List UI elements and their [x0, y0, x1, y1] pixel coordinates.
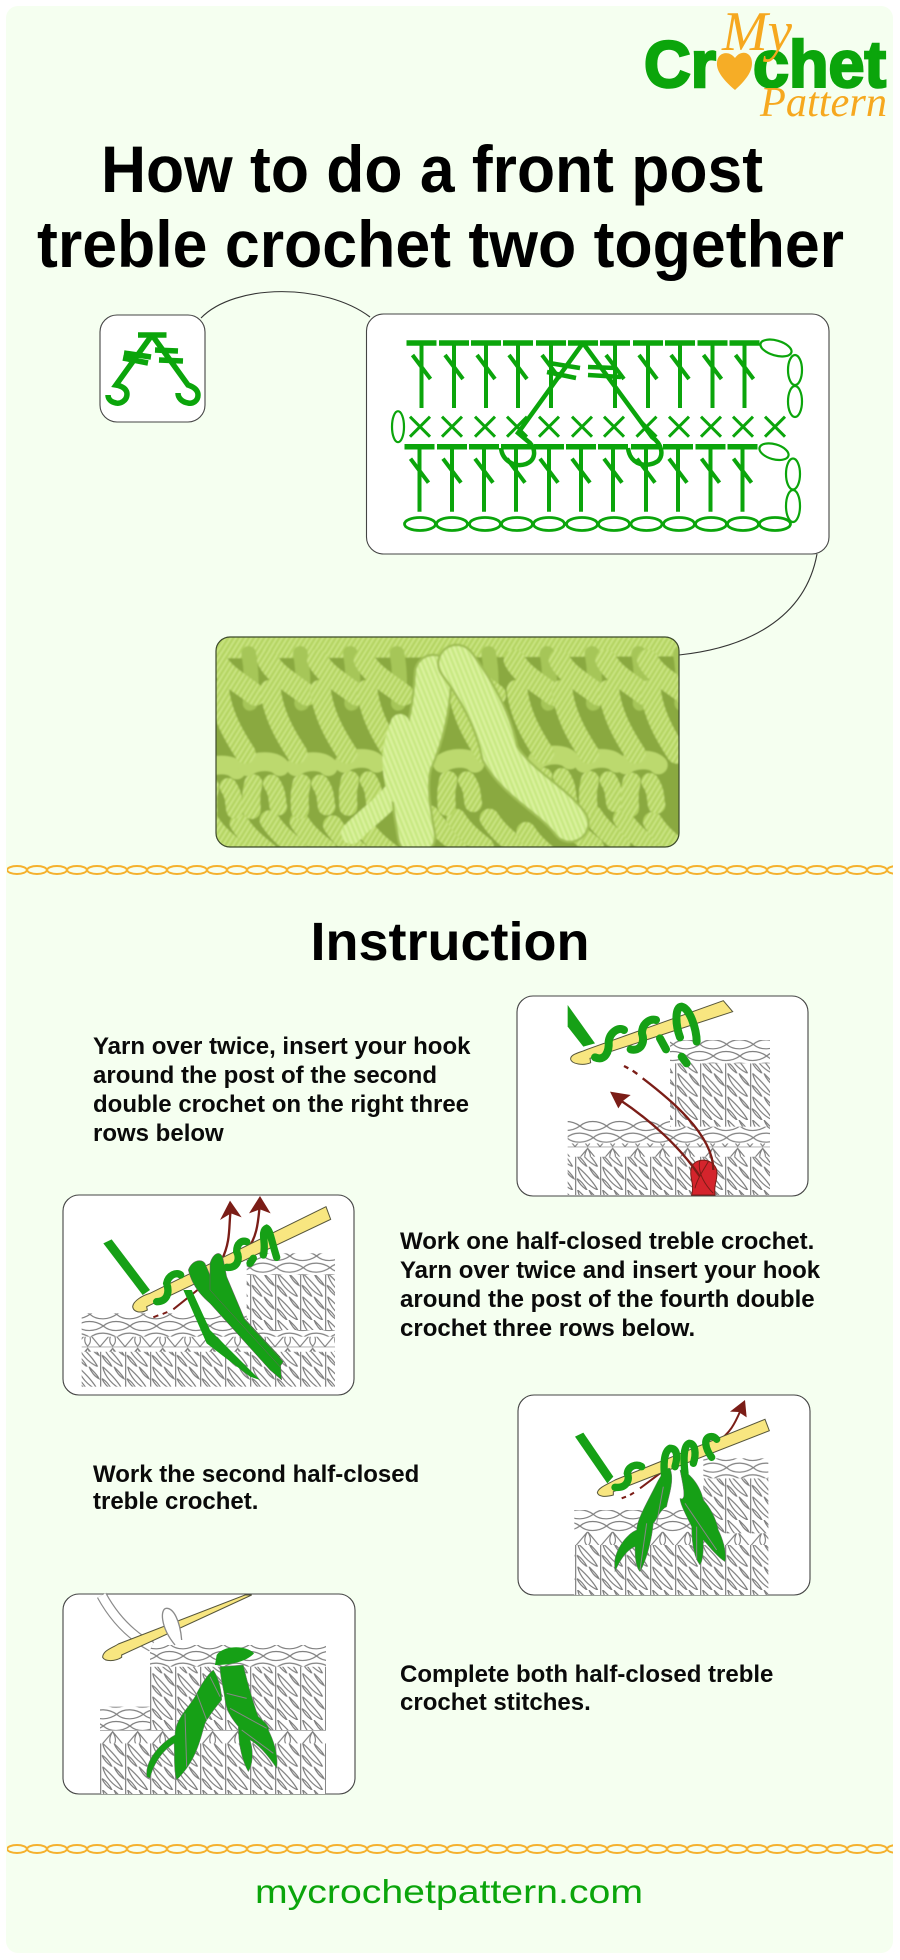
- panel: crochet chart: [366, 314, 829, 554]
- chart: turning chains: [758, 336, 802, 522]
- step 1 text: around the post of the second: [93, 1062, 437, 1089]
- chart: top treble row: [406, 343, 760, 408]
- step 2 text: Yarn over twice and insert your hook: [400, 1257, 821, 1284]
- step 1 text: Yarn over twice, insert your hook: [93, 1033, 471, 1060]
- illustration: second half-closed treble: [574, 1400, 769, 1595]
- step 2 text: crochet three rows below.: [400, 1315, 695, 1342]
- illustration: completed stitches: [100, 1595, 326, 1794]
- step 3 text: treble crochet.: [93, 1488, 258, 1515]
- step 4 text: Complete both half-closed treble: [400, 1661, 773, 1688]
- step 3 text: Work the second half-closed: [93, 1461, 419, 1488]
- panel: stitch symbol: [100, 315, 205, 422]
- chart: front post treble two together: [501, 343, 661, 465]
- photo border: [216, 637, 679, 847]
- illustration: first half-closed treble: [82, 1196, 335, 1387]
- logo word: My: My: [721, 1, 792, 63]
- illustration: hook with two yarn overs: [568, 1001, 770, 1195]
- logo heart: [717, 53, 752, 90]
- panel: step 2 illustration: [63, 1195, 354, 1395]
- chart: lower treble row: [404, 447, 758, 512]
- divider chain: upper: [7, 864, 893, 876]
- step 1 text: rows below: [93, 1120, 224, 1147]
- connector: symbol to chart: [201, 292, 370, 318]
- chart: foundation chain: [404, 518, 790, 530]
- chart: single crochet row: [392, 411, 785, 442]
- panel: step 1 illustration: [517, 996, 808, 1196]
- logo word: Crochet: Cr: [644, 27, 716, 101]
- footer url: mycrochetpattern.com: [255, 1873, 643, 1910]
- step 4 text: crochet stitches.: [400, 1689, 591, 1716]
- icon: stitch symbol: [108, 335, 198, 403]
- title: How to do a front post: [101, 132, 763, 206]
- logo word: Crochet: [644, 27, 886, 101]
- step 2 text: around the post of the fourth double: [400, 1286, 815, 1313]
- step 2 text: Work one half-closed treble crochet.: [400, 1228, 814, 1255]
- panel: step 3 illustration: [518, 1395, 810, 1595]
- title: treble crochet two together: [37, 207, 844, 281]
- divider chain: lower: [7, 1843, 893, 1855]
- step 1 text: double crochet on the right three: [93, 1091, 469, 1118]
- heading: Instruction: Instruction: [310, 912, 590, 972]
- logo word: Crochet: chet: [753, 27, 886, 101]
- logo: [644, 1, 887, 126]
- photo: crochet swatch: [216, 638, 678, 846]
- panel: step 4 illustration: [63, 1594, 355, 1794]
- title: [37, 132, 844, 281]
- logo word: Pattern: Pattern: [759, 80, 887, 126]
- connector: chart to photo: [679, 554, 817, 655]
